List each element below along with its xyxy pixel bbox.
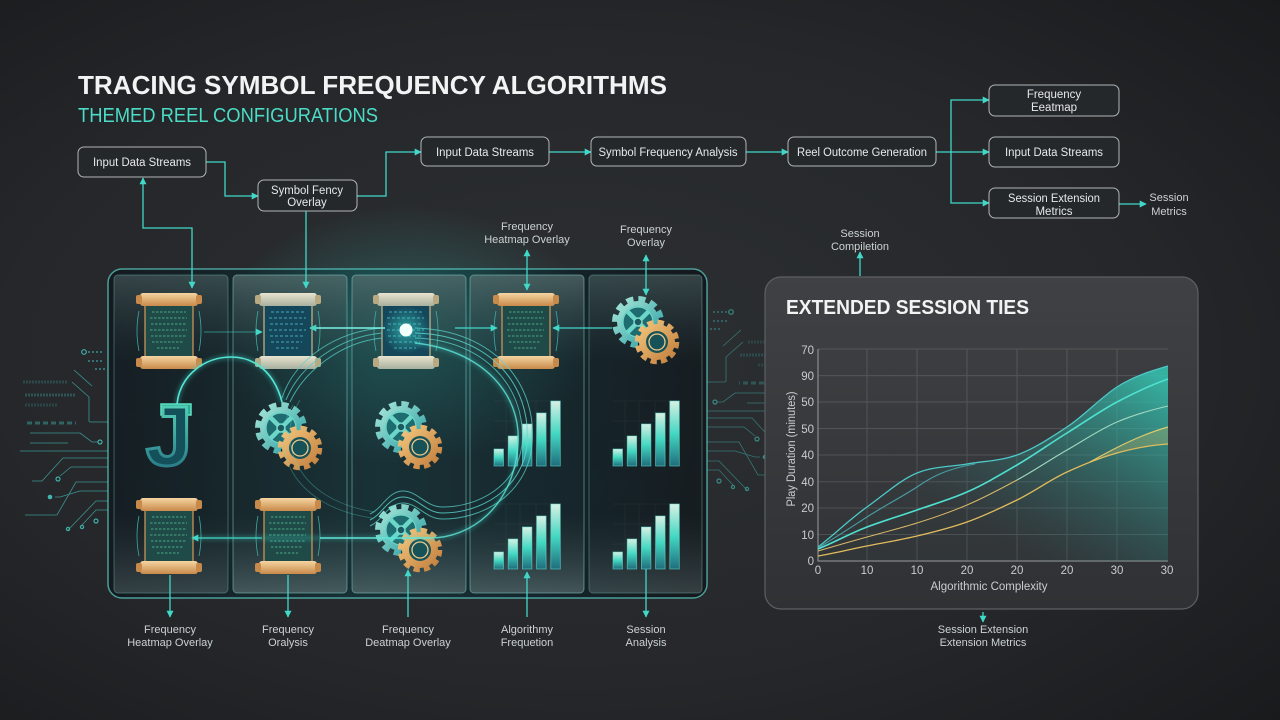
y axis labels: 50 (801, 424, 814, 436)
x axis labels: 30 (1111, 565, 1123, 577)
y axis labels: 40 (801, 450, 814, 462)
y axis labels: 40 (801, 477, 814, 489)
y axis labels: 10 (801, 530, 814, 542)
label: frequency deatmap overlay: Deatmap Overlay (365, 637, 451, 649)
y axis labels: 50 (801, 397, 814, 409)
x axis labels: 20 (1011, 565, 1023, 577)
scroll top col 4 (493, 293, 559, 369)
box: reel outcome generation (788, 137, 936, 166)
arrows: panel to labels (143, 178, 983, 622)
flow connectors (206, 100, 1146, 204)
box: symbol fency overlay (258, 180, 357, 211)
label: session analysis: Session (626, 624, 666, 636)
box: session extension metrics (989, 188, 1119, 218)
gears col 5 (616, 300, 676, 361)
gears col 2 (258, 406, 319, 467)
curves (818, 366, 1168, 556)
box: symbol frequency analysis: Symbol Frequency Analysis (598, 147, 738, 159)
label: algorithmy frequetion: Frequetion (501, 637, 553, 649)
box: input data streams (78, 147, 206, 177)
scroll top col 3 (373, 293, 439, 369)
label: session metrics: Metrics (1151, 206, 1187, 218)
y axis labels: 70 (801, 345, 814, 357)
gears col 3 (378, 404, 439, 466)
glowing node (382, 306, 430, 354)
line chart (786, 345, 1173, 593)
label: frequency oralysis: Frequency (262, 624, 314, 636)
x axis labels: 10 (911, 565, 923, 577)
box: symbol fency overlay: Symbol Fency (271, 185, 343, 197)
label: frequency deatmap overlay: Frequency (382, 624, 434, 636)
label: frequency heatmap overlay top: Heatmap Overlay (484, 234, 570, 246)
box: frequency eeatmap (989, 85, 1119, 116)
reel columns (114, 275, 702, 593)
y axis labels: 90 (801, 371, 814, 383)
bars bottom col 4 (494, 504, 560, 569)
panel: extended session ties (765, 277, 1198, 609)
bars top col 5 (613, 401, 679, 466)
label: frequency overlay top: Overlay (627, 237, 665, 249)
y axis title: Play Duration (minutes) (786, 391, 798, 506)
label: session extension metrics: Extension Metrics (940, 637, 1027, 649)
label: session completion: Session (840, 228, 880, 240)
box: symbol frequency analysis (591, 137, 746, 166)
box: frequency eeatmap: Eeatmap (1031, 102, 1077, 114)
x axis labels: 30 (1161, 565, 1173, 577)
circuit traces: left (20, 350, 108, 531)
label: session completion: Compiletion (831, 241, 889, 253)
label: algorithmy frequetion: Algorithmy (501, 624, 553, 636)
gears bottom col 3 (378, 508, 439, 569)
subtitle: THEMED REEL CONFIGURATIONS (78, 105, 378, 127)
scroll top col 2 (255, 293, 321, 369)
reel panel (108, 205, 707, 598)
y axis labels (801, 345, 814, 568)
scroll bottom col 1 (136, 498, 202, 574)
label: frequency heatmap overlay top: Frequency (501, 221, 553, 233)
chart heading: EXTENDED SESSION TIES (786, 297, 1029, 319)
circuit traces: right (707, 310, 795, 491)
box: input data streams 3: Input Data Streams (1005, 147, 1103, 159)
box: session extension metrics: Session Extension (1008, 193, 1100, 205)
flow diagram (78, 85, 1189, 218)
y axis labels: 20 (801, 503, 814, 515)
box: input data streams 3 (989, 137, 1119, 167)
yellow tint (1090, 427, 1168, 462)
label: session analysis: Analysis (626, 637, 667, 649)
box: reel outcome generation: Reel Outcome Generation (797, 147, 927, 159)
x axis labels: 0 (815, 565, 821, 577)
x axis title: Algorithmic Complexity (930, 581, 1048, 593)
x axis labels: 10 (861, 565, 873, 577)
box: input data streams 2: Input Data Streams (436, 147, 534, 159)
scroll bottom col 2 (255, 498, 321, 574)
x axis labels (815, 565, 1173, 577)
bars top col 4 (494, 401, 560, 466)
signal arcs (177, 328, 533, 538)
J symbol: J (146, 389, 192, 483)
box: input data streams 2 (421, 137, 549, 166)
label: frequency heatmap overlay bottom: Heatmap Overlay (127, 637, 213, 649)
label: frequency oralysis: Oralysis (268, 637, 308, 649)
y axis labels: 0 (808, 556, 814, 568)
bars bottom col 5 (613, 504, 679, 569)
scroll top col 1 (136, 293, 202, 369)
label: frequency overlay top: Frequency (620, 224, 672, 236)
box: symbol fency overlay: Overlay (287, 197, 327, 209)
chart area (818, 366, 1168, 561)
label: session extension metrics: Session Extension (938, 624, 1028, 636)
x axis labels: 20 (1061, 565, 1073, 577)
label: frequency heatmap overlay bottom: Frequency (144, 624, 196, 636)
label: session metrics: Session (1149, 192, 1189, 204)
x axis labels: 20 (961, 565, 973, 577)
title: TRACING SYMBOL FREQUENCY ALGORITHMS (78, 70, 667, 100)
box: session extension metrics: Metrics (1035, 206, 1073, 218)
reel links (204, 328, 612, 332)
box: frequency eeatmap: Frequency (1027, 89, 1081, 101)
box: input data streams: Input Data Streams (93, 157, 191, 169)
